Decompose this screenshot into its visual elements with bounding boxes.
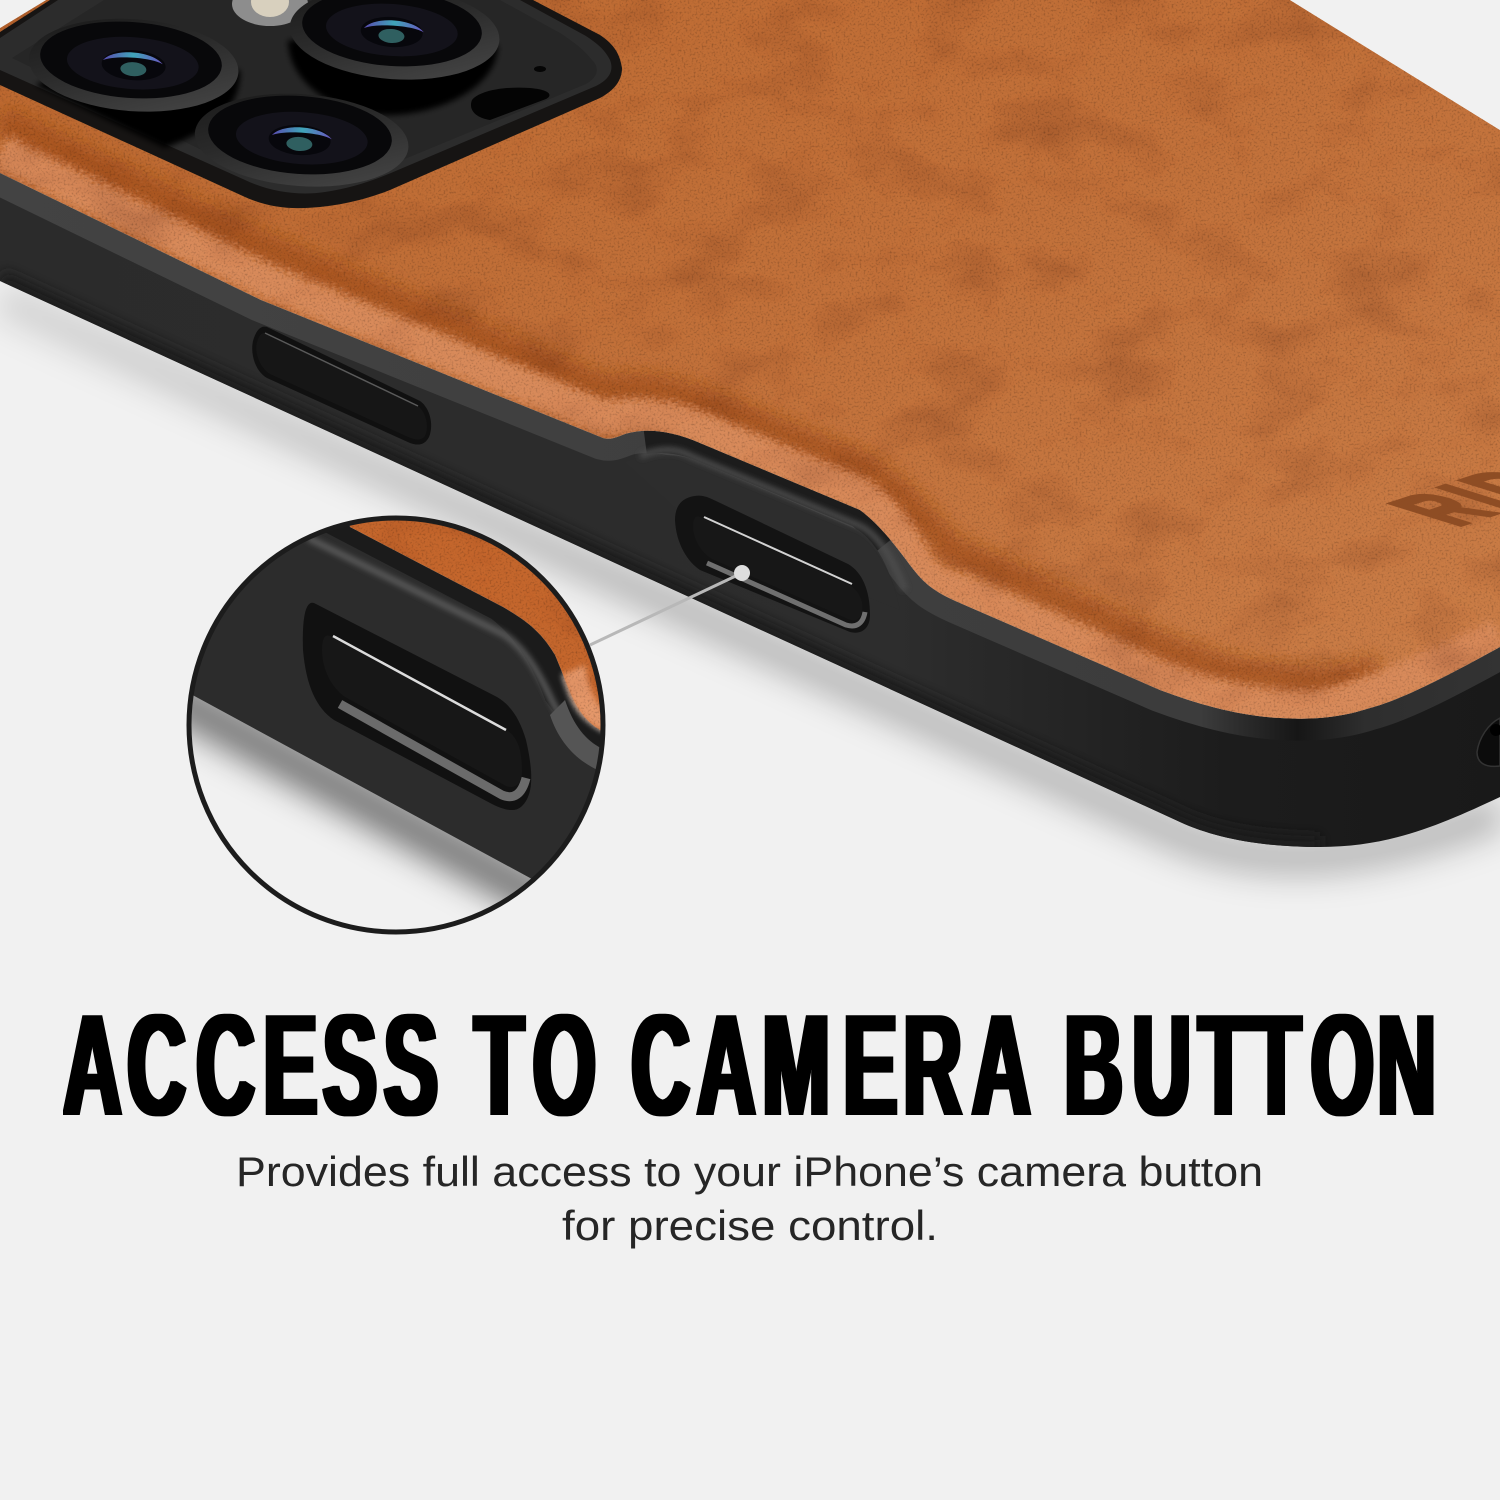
violet reflection [272,125,332,139]
teal core [378,28,405,44]
bumper lower edge shade [0,281,1320,847]
pupil [360,15,424,49]
recess outer [675,496,870,633]
magnified content [192,520,600,913]
side button recess [252,327,431,445]
camera outer frame [0,0,622,208]
phone case [0,0,1500,858]
inner glass [324,0,460,61]
pupil [268,123,332,157]
magnified bevel [340,704,526,797]
callout connector line [590,573,742,645]
inner glass [234,108,369,169]
title: ACCESS TO CAMERA BUTTON [63,984,1436,1146]
camera island [0,0,622,208]
button highlight [704,517,852,584]
lens barrel shadows [35,40,498,148]
outer glass [38,16,224,104]
top lens barrel shadow [288,40,498,115]
description line 2: for precise control. [562,1202,938,1249]
frame bevel [0,0,611,194]
leather rolled edge glow [0,152,1500,708]
magnified leather surface [350,520,600,730]
leather edge shading [0,120,1500,708]
charging port [1477,718,1500,766]
barrel ring [192,87,412,193]
bump body fill [625,455,900,610]
magnified circle [186,516,606,934]
zoom callout [186,516,750,934]
magnified leather [350,520,600,735]
callout anchor dot [734,565,750,581]
magnified highlight [306,536,560,712]
outer glass [206,90,394,180]
flash [232,0,308,26]
lower edge dark stroke [0,281,1320,847]
magnified shadow [192,696,531,913]
magnified button face [521,778,522,779]
microphone dot [534,66,546,72]
lidar sensor [471,88,549,120]
dark strip along button bump [645,439,888,542]
left lens barrel shadow [35,70,240,148]
bumper highlight band [0,173,1500,719]
camera button face [693,516,862,620]
lower bevel [707,563,865,626]
flash ring [232,0,308,26]
description [236,1148,1263,1249]
bump highlight line [640,450,905,590]
magnified button recess [303,603,531,810]
pupil [101,48,167,82]
inner glass [65,33,200,94]
barrel ring [287,0,503,86]
description line 1: Provides full access to your iPhone’s camera button [236,1148,1263,1195]
left lens [26,12,242,118]
leather back [0,0,1500,719]
side button face [256,333,427,440]
teal core [286,136,313,152]
magnified dark strip [330,510,610,750]
leather dark crease [0,120,1380,682]
magnified grey edge [550,700,600,769]
bottom lens [192,87,412,193]
violet reflection [103,50,163,64]
teal core [120,61,147,77]
port opening [1477,718,1500,766]
top lens [287,0,503,86]
magnified bumper [194,532,596,878]
magnified leather glow [558,664,600,735]
upper side button [252,327,431,445]
camera plate [12,0,597,185]
magnifier border [189,518,603,932]
flash lamp [251,0,289,17]
magnifier background [190,519,602,931]
magnified button highlight [333,636,506,730]
side button highlight [265,333,418,406]
camera button recess [675,496,870,633]
port hole [1490,724,1500,736]
phone shadow [0,298,1500,858]
violet reflection [364,18,424,32]
black bumper [0,150,1500,847]
leather surface [0,0,1500,719]
outer glass [300,0,484,72]
barrel ring [26,12,242,118]
